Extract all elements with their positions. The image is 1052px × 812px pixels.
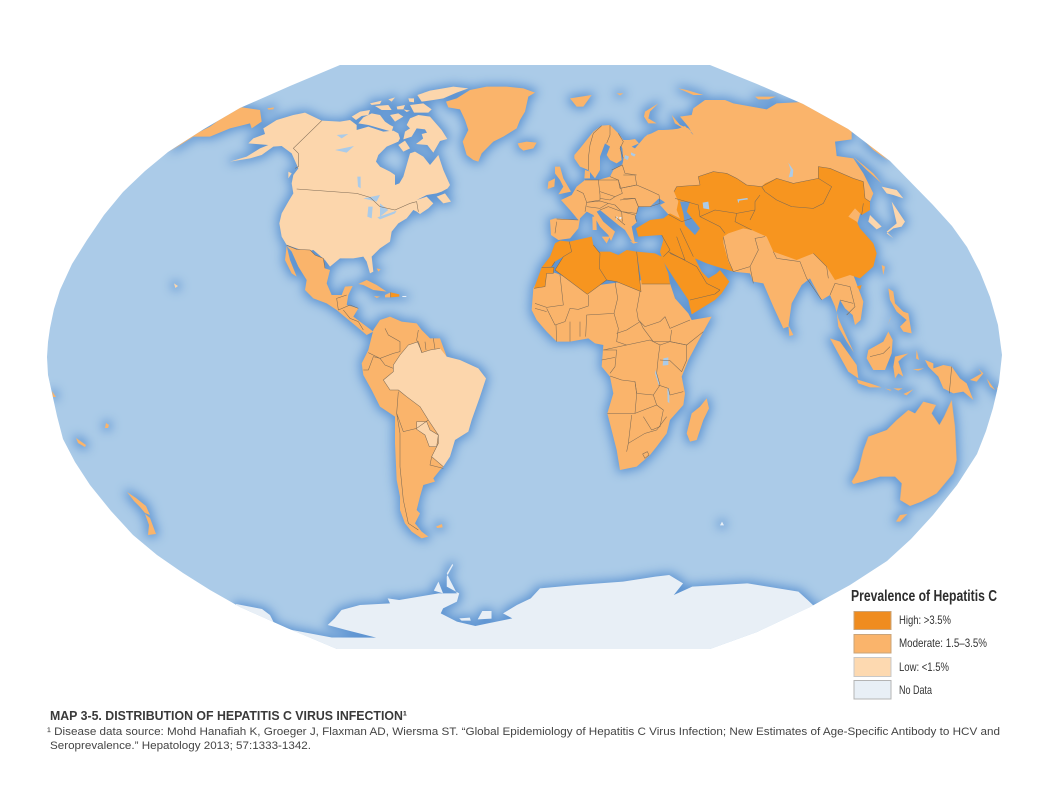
legend item: moderate: Moderate: 1.5–3.5% xyxy=(899,636,987,650)
legend item: high: High: >3.5% xyxy=(899,613,951,627)
legend item: low xyxy=(854,658,949,676)
Africa borders xyxy=(535,275,952,458)
Europe and western Russia xyxy=(540,117,733,251)
Pacific islands and New Zealand xyxy=(52,391,156,535)
African lakes xyxy=(655,357,669,403)
Russia and Arctic islands xyxy=(570,88,888,275)
legend item: no data xyxy=(854,680,932,699)
ocean xyxy=(40,60,1010,650)
South and Southeast Asia xyxy=(723,233,1002,400)
South America xyxy=(362,317,486,538)
Antarctica xyxy=(295,564,854,650)
world map xyxy=(40,60,1010,660)
inland water xyxy=(335,134,793,403)
North America xyxy=(170,107,451,335)
source footnote: Seroprevalence.” Hepatology 2013; 57:1333-1342. xyxy=(50,740,311,752)
North American lakes xyxy=(335,134,397,219)
Europe borders xyxy=(555,125,692,233)
Asia and Middle East borders xyxy=(662,167,870,300)
map title: MAP 3-5. DISTRIBUTION OF HEPATITIS C VIRUS INFECTION¹ xyxy=(50,709,407,723)
source footnote: ¹ Disease data source: Mohd Hanafiah K, Groeger J, Flaxman AD, Wiersma ST. “Global Epidemiology of Hepatitis C Virus Infection; New Estimates of Age-Specific Antibody to HCV and xyxy=(47,726,1000,738)
landmasses xyxy=(52,87,1002,660)
European lakes xyxy=(616,152,636,219)
high prevalence: North Africa xyxy=(534,237,670,294)
North Africa borders xyxy=(534,242,670,294)
legend item: low: Low: <1.5% xyxy=(899,660,949,674)
legend title: Prevalence of Hepatitis C xyxy=(851,588,997,605)
source footnote xyxy=(47,726,1000,752)
Africa xyxy=(532,270,724,525)
Canadian Arctic and Greenland xyxy=(352,87,537,162)
South America borders xyxy=(363,328,443,530)
Australia xyxy=(852,400,957,522)
Caspian Sea and Central Asian lakes xyxy=(680,163,793,235)
North America borders xyxy=(287,121,418,330)
country borders xyxy=(287,121,952,530)
legend xyxy=(851,588,997,699)
high prevalence: central Asia, China, Middle East xyxy=(636,167,905,314)
legend item: moderate xyxy=(854,634,987,653)
Antarctic coast at lower left xyxy=(230,596,338,649)
legend item: no data: No Data xyxy=(899,683,932,697)
legend item: high xyxy=(854,612,951,630)
